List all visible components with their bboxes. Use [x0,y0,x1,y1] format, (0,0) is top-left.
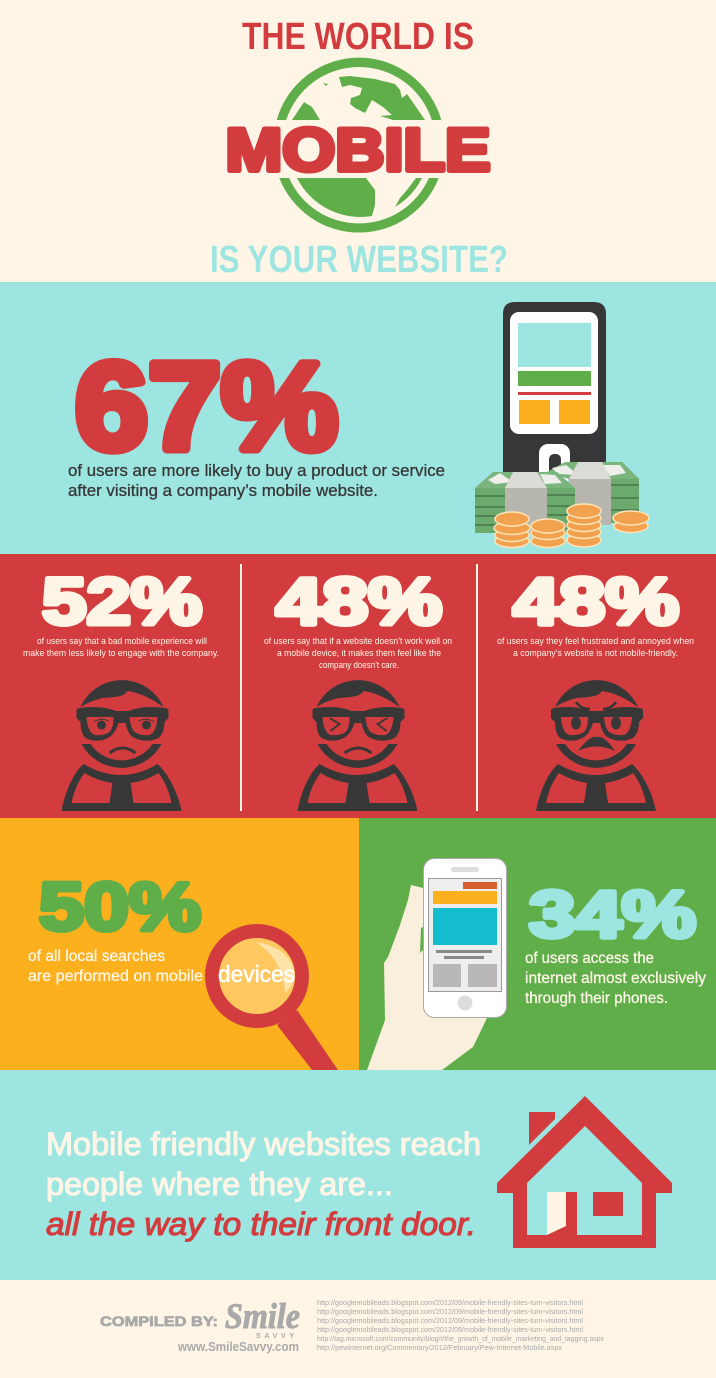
title: the world is: THE WORLD IS [242,16,474,58]
text: sources: http://tag.microsoft.com/community/blog/t/the_growth_of_mobile_marketing_and_tagging.aspx [317,1336,604,1343]
text: sources [317,1300,604,1352]
panel: local searches [0,818,359,1070]
panel: header [0,0,716,282]
text: 34% description: of users access the [525,950,654,967]
icon: magnifying glass [212,931,338,1070]
icon: person squinting [298,680,418,811]
text: 34% description: internet almost exclusively [525,970,706,987]
statistic: 67%: 67% [75,338,338,476]
text: 67% description: after visiting a company’s mobile website. [68,481,378,500]
text: website: www.SmileSavvy.com [177,1340,299,1354]
text: 52% description [23,636,219,659]
text: 67% description: of users are more likely to buy a product or service [68,461,445,480]
text: front door line: all the way to their front door. [46,1206,476,1242]
statistic: 48% first: 48% [276,564,442,638]
statistic: 34%: 34% [529,877,696,951]
icon: money stacks [475,462,639,533]
text: compiled by: COMPILED BY: [100,1313,218,1329]
panel: frustration statistics [0,554,716,818]
text: sources: http://googlemobileads.blogspot.com/2012/09/mobile-friendly-sites-turn-visitors.html [317,1318,583,1325]
icon: globe [277,58,441,233]
icon: house [497,1096,672,1248]
icon: person looking aside [62,680,182,811]
logo: smile savvy: Smile [225,1296,300,1336]
text: sources: http://googlemobileads.blogspot.com/2012/09/mobile-friendly-sites-turn-visitors.html [317,1300,583,1307]
text: 34% description [525,950,706,1007]
icon: person angry [536,680,656,811]
statistic: 50%: 50% [39,869,201,945]
text: 48% first description: a mobile device, it makes them feel like the [277,648,441,659]
text: 48% second description: of users say they feel frustrated and annoyed when [497,636,694,647]
text: mobile friendly message: Mobile friendly websites reach [46,1126,481,1162]
text: 50% description: are performed on mobile [28,968,203,985]
statistic: 52%: 52% [42,564,202,638]
text: sources: http://googlemobileads.blogspot.com/2012/09/mobile-friendly-sites-turn-visitors.html [317,1327,583,1334]
text: 67% description [68,461,445,500]
text: mobile friendly message [46,1126,481,1202]
text: mobile friendly message: people where they are... [46,1166,393,1202]
text: sources: http://pewinternet.org/Commentary/2012/February/Pew-Internet-Mobile.aspx [317,1345,563,1352]
text: sources: http://googlemobileads.blogspot.com/2012/09/mobile-friendly-sites-turn-visitors.html [317,1309,583,1316]
text: devices: devices [218,961,295,987]
text: 48% second description [497,636,694,659]
text: 34% description: through their phones. [525,990,668,1007]
text: 52% description: make them less likely to engage with the company. [23,648,219,659]
panel: front door message [0,1070,716,1280]
icon: coin stacks [494,504,649,548]
icon: hand holding phone [367,858,506,1070]
title: mobile: MOBILE [226,116,490,184]
logo: smile savvy: SAVVY [256,1333,294,1340]
text: 52% description: of users say that a bad mobile experience will [37,636,207,647]
panel: footer [0,1280,716,1378]
panel: 67 percent [0,282,716,554]
text: 50% description: of all local searches [28,948,165,965]
text: 48% first description: of users say that if a website doesn’t work well on [264,636,452,647]
text: 48% first description [264,636,452,671]
text: 50% description [28,948,203,985]
icon: phone [503,302,606,484]
subtitle: is your website: IS YOUR WEBSITE? [210,239,508,281]
panel: phone access [359,818,716,1070]
statistic: 48% second: 48% [513,564,679,638]
text: 48% second description: a company’s website is not mobile-friendly. [513,648,678,659]
text: 48% first description: company doesn’t care. [319,660,399,671]
